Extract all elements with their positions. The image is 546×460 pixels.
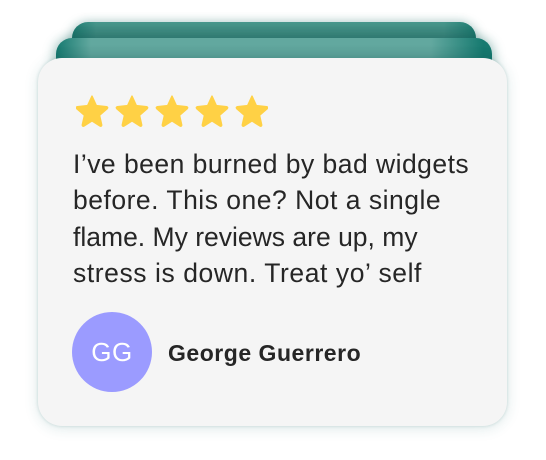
front card panel — [38, 58, 507, 426]
middle card — [56, 38, 492, 98]
reviewer name: George Guerrero — [168, 340, 361, 366]
review quote text: before. This one? Not a single — [73, 185, 441, 215]
review quote text — [73, 149, 469, 288]
review quote text: I’ve been burned by bad widgets — [73, 149, 469, 179]
star rating — [76, 95, 268, 127]
review quote text: stress is down. Treat yo’ self — [73, 258, 422, 288]
review quote text: flame. My reviews are up, my — [73, 222, 418, 252]
avatar with initials: GG — [91, 337, 133, 367]
back card — [72, 22, 476, 82]
avatar with initials — [72, 312, 152, 392]
